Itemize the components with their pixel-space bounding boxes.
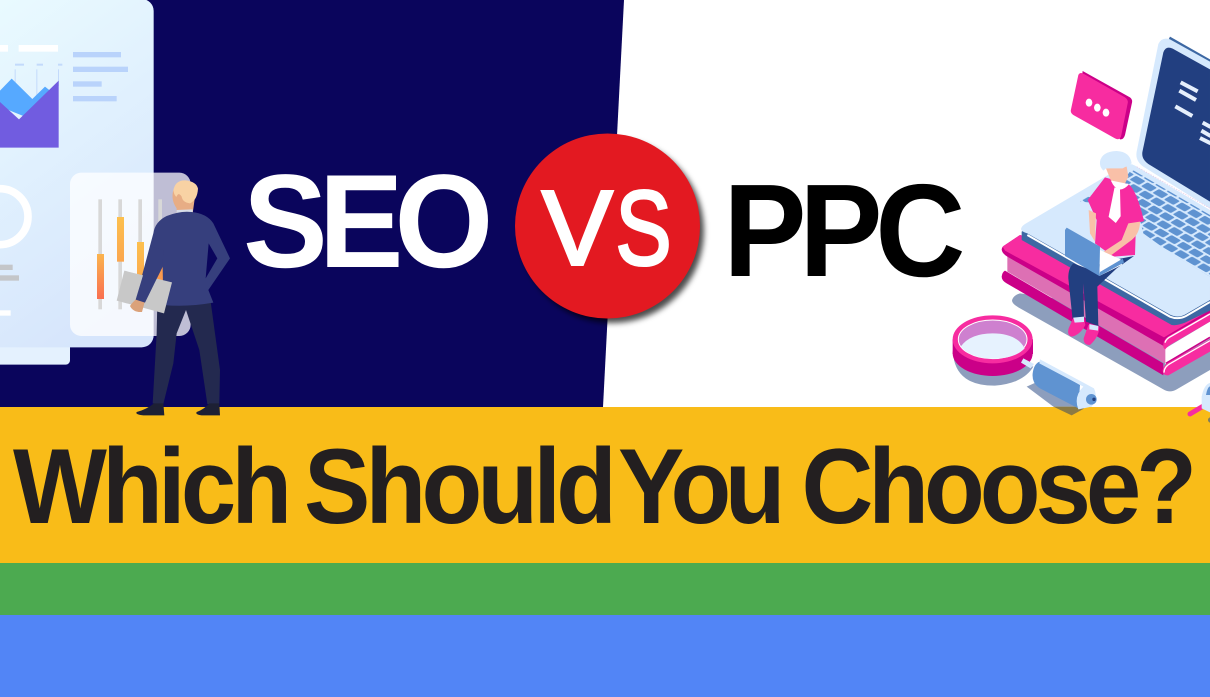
jacket (136, 212, 230, 306)
head (1106, 166, 1128, 184)
shirt (1088, 177, 1144, 257)
banner strip: yellow (0, 407, 1210, 563)
VS badge: V (542, 170, 613, 288)
banner strip: blue (0, 615, 1210, 697)
VS badge (515, 134, 704, 323)
shoes (136, 403, 220, 415)
donut (0, 189, 28, 245)
grey bars (0, 265, 19, 316)
main question heading: You (618, 426, 780, 546)
small laptop (1099, 250, 1123, 276)
text lines (73, 52, 128, 101)
white header bars (0, 45, 58, 52)
background: navy left side (0, 0, 624, 407)
area chart (0, 64, 62, 148)
chat bubble (1071, 71, 1132, 139)
magnifying glass (953, 315, 1097, 415)
stacked books (1002, 235, 1210, 375)
collar and tie (1109, 181, 1128, 222)
small tool (1190, 383, 1210, 423)
laptop screen (1136, 37, 1210, 208)
main question heading: Choose? (801, 426, 1192, 546)
SEO heading: SEO (243, 146, 488, 296)
shoes (1068, 318, 1099, 345)
lower panel (0, 300, 70, 365)
shadow (1012, 293, 1210, 391)
folder (117, 271, 172, 313)
main question heading: Should (304, 426, 612, 546)
main question heading: Which (13, 426, 287, 546)
banner strip: green (0, 563, 1210, 615)
illustration: analytics dashboard (0, 0, 191, 365)
candle chart card (70, 173, 191, 336)
trousers (1068, 256, 1134, 326)
hand (130, 299, 145, 312)
legs (153, 302, 220, 404)
illustration: businessman (117, 180, 230, 415)
VS badge: S (616, 170, 672, 288)
head (173, 180, 198, 214)
main panel (0, 0, 154, 347)
illustration: isometric laptop, books and person (953, 37, 1210, 423)
laptop base (1021, 164, 1210, 325)
PPC heading: PPC (723, 158, 963, 305)
jacket sleeve (136, 247, 163, 303)
arms (1089, 210, 1096, 242)
keyboard (1080, 170, 1210, 276)
person (1065, 151, 1144, 345)
